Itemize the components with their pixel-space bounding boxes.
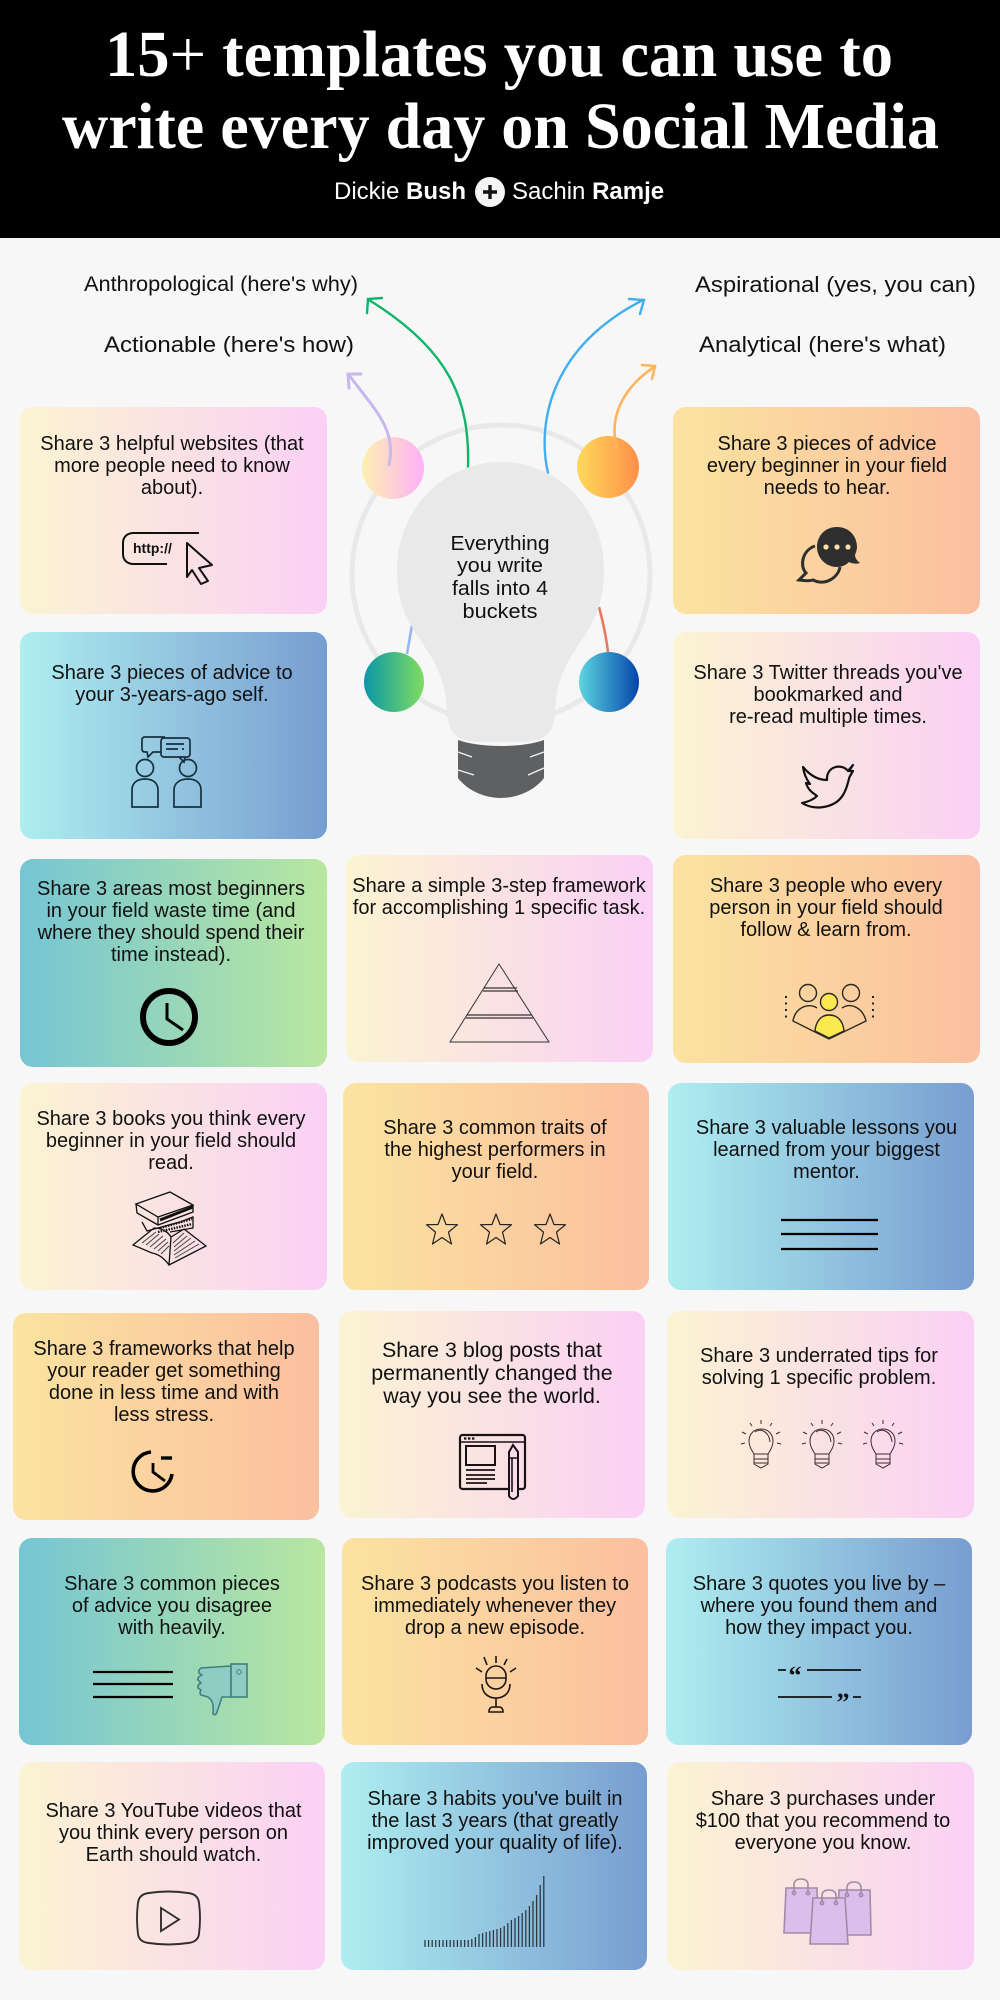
icon: three stars [426,1213,566,1245]
author one: Dickie Bush [334,178,466,205]
text [623,1788,1000,1854]
text: Share 3 habits you've built in [367,1788,623,1810]
text [33,1338,295,1426]
text [383,1117,607,1183]
icon: group of people [785,984,874,1040]
text: Share 3 Twitter threads you've [693,662,963,684]
text: time instead). [111,944,231,966]
circle: top left [362,437,424,499]
text: where you found them and [701,1595,937,1617]
text [361,1573,629,1639]
icon: url and cursor: http:// [133,540,172,556]
text: re-read multiple times. [729,706,927,728]
icon: clock [140,988,198,1046]
text: solving 1 specific problem. [702,1367,936,1389]
card: habits [341,1762,647,1970]
card: quotes [666,1538,972,1745]
card: helpful websites [20,407,327,614]
card: advice for beginners [673,407,980,614]
text: with heavily. [118,1617,226,1639]
icon: chat bubbles [796,527,860,584]
text [40,433,304,499]
text [295,1788,695,1854]
text: needs to hear. [764,477,890,499]
card: disagree with advice [19,1538,325,1745]
text: person in your field should [709,897,943,919]
text: learned from your biggest [713,1139,940,1161]
text [693,1573,946,1639]
icon: timer [131,1450,174,1493]
text: everyone you know. [735,1832,911,1854]
connector: red [599,607,608,652]
ring around bulb [352,425,650,723]
text: permanently changed the [371,1360,613,1384]
text: Share 3 purchases under [711,1788,935,1810]
text: less stress. [114,1404,214,1426]
label: aspirational: Aspirational (yes, you can) [695,272,976,297]
bulb caption: you write [457,555,543,577]
text: your reader get something [47,1360,281,1382]
text [700,1345,938,1389]
text: every beginner in your field [707,455,947,477]
bulb base [458,740,544,798]
header banner [0,0,1000,238]
text: Share a simple 3-step framework [352,875,646,897]
connector: light blue [407,625,412,654]
icon: books [132,1191,208,1266]
icon: three lines [781,1218,878,1250]
card: youtube [19,1762,325,1970]
card: advice to past self [20,632,327,839]
text: the last 3 years (that greatly [372,1810,618,1832]
text: Share 3 quotes you live by – [693,1573,945,1595]
title [62,18,939,163]
circle: bottom left [364,652,424,712]
text: for accomplishing 1 specific task. [353,897,645,919]
text: beginner in your field should [46,1130,296,1152]
title: write every day on Social Media [62,90,939,163]
text [352,875,646,919]
card: purchases [667,1762,974,1970]
text: how they impact you. [725,1617,913,1639]
text [693,662,963,728]
arrow: purple [348,374,391,465]
label: analytical: Analytical (here's what) [699,332,946,357]
text: Share 3 people who every [710,875,942,897]
bulb glass [397,462,604,742]
text: Share 3 frameworks that help [33,1338,295,1360]
icon: twitter bird [800,764,854,809]
text: Share 3 books you think every [36,1108,306,1130]
text: Share 3 underrated tips for [700,1345,938,1367]
text: Share 3 blog posts that [382,1338,602,1362]
card: blog posts [339,1311,645,1518]
text: immediately whenever they [374,1595,616,1617]
icon: lines and thumbs down [93,1663,248,1716]
text: way you see the world. [383,1384,601,1408]
text: the highest performers in [384,1139,606,1161]
text: done in less time and with [49,1382,279,1404]
icon: quotation lines [778,1661,861,1717]
card: books [20,1083,327,1290]
text: in your field waste time (and [46,900,296,922]
label: anthropological: Anthropological (here's why) [84,273,358,296]
text [64,1573,280,1639]
text: Share 3 common pieces [64,1573,280,1595]
bucket labels and bulb diagram [84,272,976,798]
text: bookmarked and [754,684,902,706]
text: about). [141,477,203,499]
text: your field. [452,1161,538,1183]
card: wasted time [20,859,327,1067]
label: actionable: Actionable (here's how) [104,332,354,357]
text: Share 3 pieces of advice to [51,662,293,684]
text [371,1338,613,1408]
icon: quotation lines: ” [836,1688,850,1717]
text: where they should spend their [38,922,304,944]
text: drop a new episode. [405,1617,585,1639]
text: more people need to know [54,455,290,477]
card: 3-step framework [346,855,653,1062]
icon: shopping bags [782,1877,874,1946]
card: podcasts [342,1538,648,1745]
text: Share 3 pieces of advice [717,433,937,455]
text: $100 that you recommend to [696,1810,950,1832]
text: Earth should watch. [86,1844,261,1866]
text: Share 3 areas most beginners [37,878,305,900]
icon: quotation lines: “ [788,1661,802,1690]
bulb caption: Everything [450,533,550,555]
bulb caption [450,533,550,623]
text: of advice you disagree [72,1595,272,1617]
icon: play button [136,1890,201,1946]
arrow: blue [545,299,644,473]
icon: pyramid [449,963,550,1042]
card: people to follow [673,855,980,1063]
icon: url and cursor [122,532,213,585]
authors [334,177,664,207]
title: 15+ templates you can use to [105,18,893,91]
bulb caption: buckets [462,601,538,623]
icon: article and pencil [458,1434,526,1500]
icon: two people talking [131,736,202,808]
text [709,875,943,941]
card: frameworks [13,1313,319,1520]
text [51,662,293,706]
text: mentor. [793,1161,860,1183]
text: Share 3 YouTube videos that [45,1800,302,1822]
chart: exponential growth bars [424,1874,545,1948]
circle: top right [577,436,639,498]
text: Share 3 valuable lessons you [696,1117,957,1139]
circle: bottom right [579,652,639,712]
card: underrated tips [667,1311,974,1518]
text: you think every person on [59,1822,288,1844]
card: common traits [343,1083,649,1290]
text: Share 3 podcasts you listen to [361,1573,629,1595]
text [45,1800,302,1866]
card: lessons from mentor [668,1083,974,1290]
text [37,878,305,966]
bulb caption: falls into 4 [452,578,548,600]
text [707,433,947,499]
arrow: orange [615,365,655,448]
text: improved your quality of life). [367,1832,623,1854]
card: twitter threads [673,632,980,839]
plus icon [475,177,505,207]
text: Share 3 helpful websites (that [40,433,304,455]
icon: microphone [476,1656,516,1713]
icon: three light bulbs [740,1420,904,1469]
text: Share 3 common traits of [383,1117,607,1139]
author two: Sachin Ramje [512,178,664,205]
text: follow & learn from. [740,919,912,941]
text [696,1117,957,1183]
text: your 3-years-ago self. [75,684,269,706]
text: read. [148,1152,194,1174]
text [36,1108,306,1174]
arrow: green [367,298,468,467]
